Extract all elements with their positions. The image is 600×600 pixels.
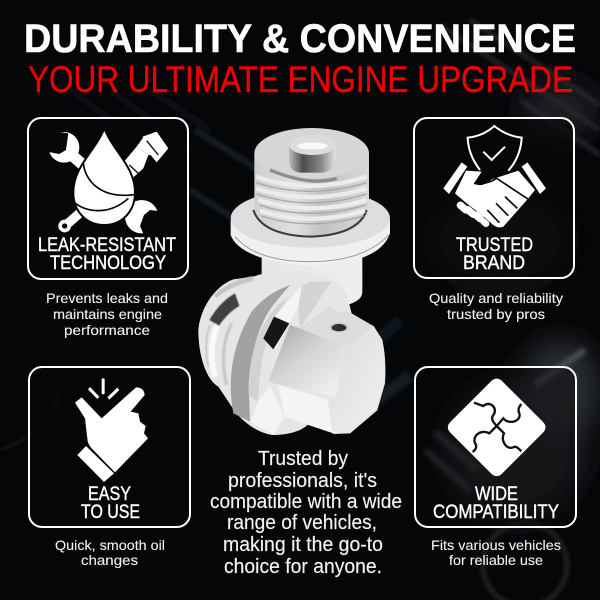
panel: easy to use [29,367,190,527]
hex head lower facet [278,385,333,433]
center text block: Trusted by [258,447,349,470]
label: WIDE [475,484,518,505]
description: leak-resistant [46,290,168,338]
drilled hole [329,322,349,332]
panel: wide compatibility [415,367,576,527]
product: rear magnetic drain plug [231,128,390,304]
title: DURABILITY & CONVENIENCE [24,17,576,61]
description: easy to use: Quick, smooth oil [55,537,165,553]
description: wide compatibility [431,537,561,568]
center text block [210,447,402,578]
panel: leak-resistant technology [28,118,188,279]
panel: easy to use: TO USE [81,502,140,523]
center text block: making it the go-to [223,533,383,556]
thread bands [206,278,253,385]
hex head end face [328,327,385,433]
hex head front facet [268,325,343,397]
threaded barrel [253,128,369,237]
description: easy to use [55,537,165,568]
panel: trusted brand: BRAND [463,253,525,274]
panel: wide compatibility: COMPATIBILITY [433,502,559,523]
description: trusted brand: Quality and reliability [429,290,563,306]
product: front hex drain plug [198,271,385,435]
center text block: range of vehicles, [227,511,377,534]
magnet nub [289,135,336,173]
neck [262,253,362,304]
description: wide compatibility: Fits various vehicles [431,537,561,553]
center text block: choice for anyone. [224,555,382,578]
description: leak-resistant: performance [64,322,150,338]
hex head top facet [300,307,373,347]
description: easy to use: changes [81,552,138,568]
panel: leak-resistant technology: TECHNOLOGY [50,253,166,274]
center text block: compatible with a wide [210,490,402,513]
icon: puzzle diamond [448,379,545,476]
center text block: professionals, it's [228,469,377,492]
icon: shield and handshake [443,126,546,228]
description: trusted brand: trusted by pros [447,306,545,322]
description: wide compatibility: for reliable use [449,552,543,568]
label: EASY [88,484,131,505]
description: leak-resistant: maintains engine [53,306,162,322]
description: trusted brand [429,290,563,322]
icon: finger snap hand [75,378,148,482]
icon: oil drop with wrenches [47,128,168,235]
label: TRUSTED [456,235,533,256]
description: leak-resistant: Prevents leaks and [46,290,168,306]
label: LEAK-RESISTANT [38,235,176,256]
panel: trusted brand [414,118,574,278]
oil drop [73,128,135,225]
plug silhouette [198,271,385,435]
washer [231,189,390,267]
sealing washer bands [231,282,332,435]
